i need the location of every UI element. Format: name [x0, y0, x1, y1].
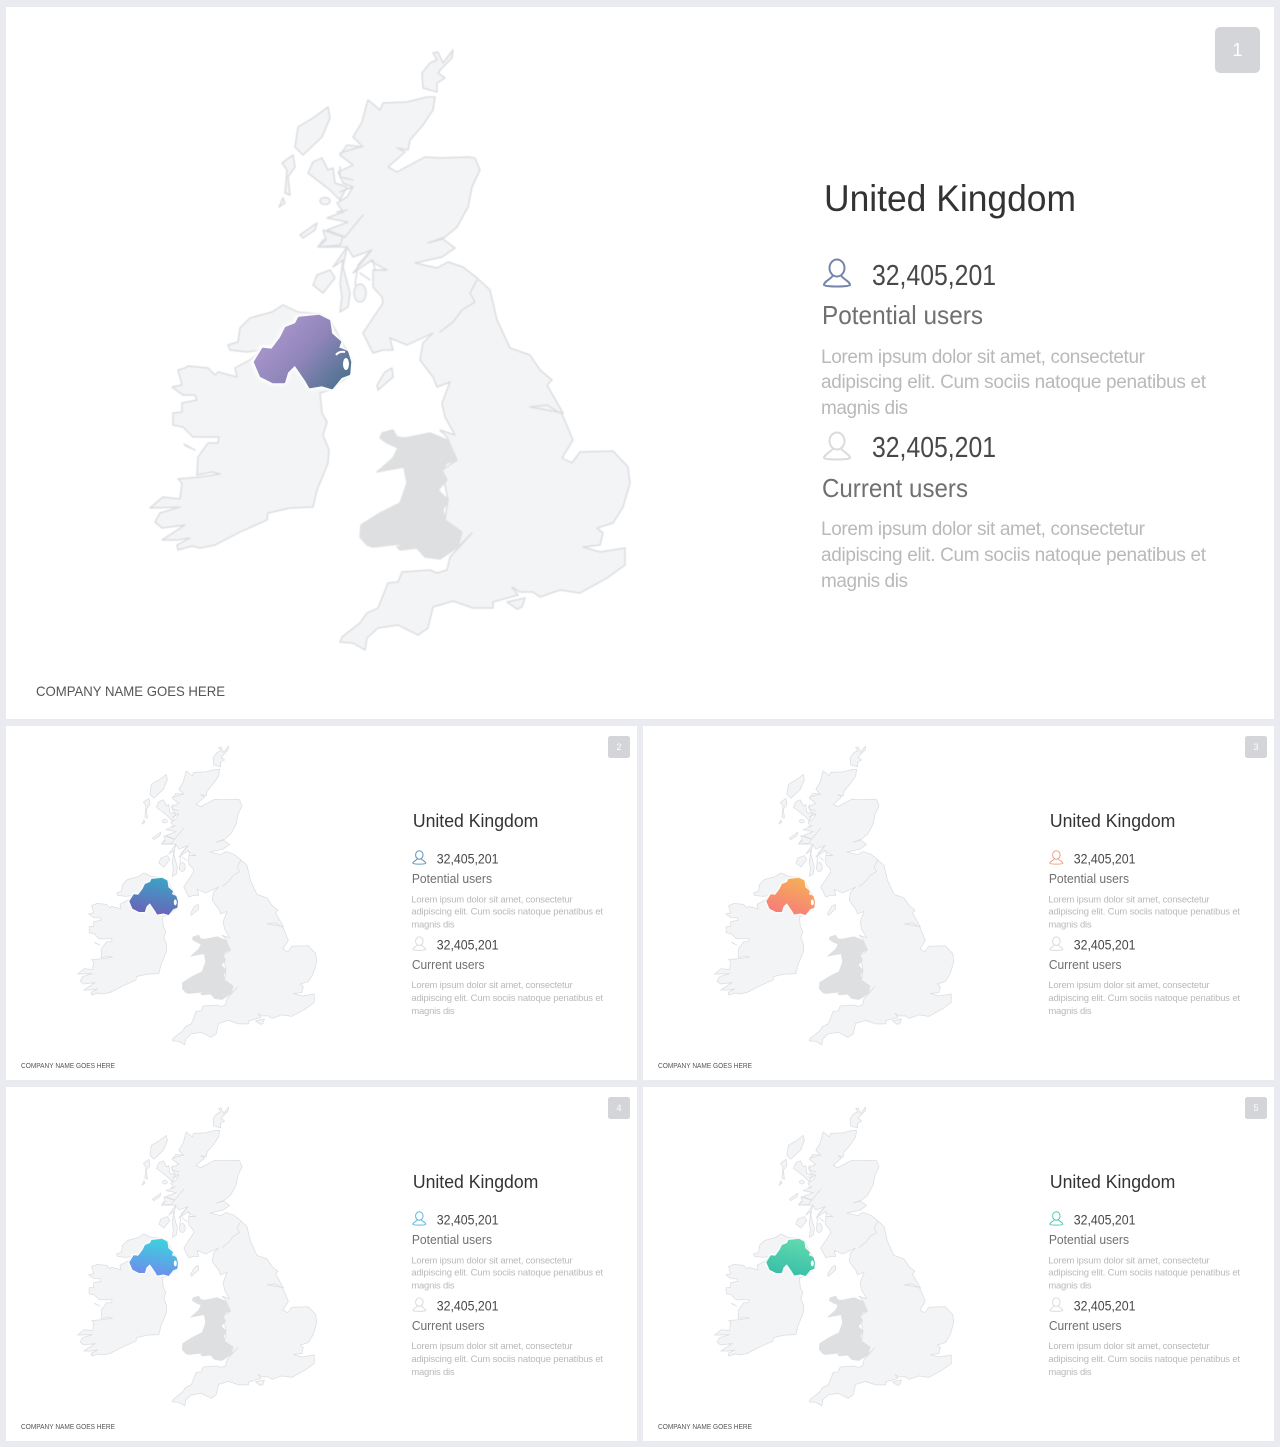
text column: Potential users — [1049, 1232, 1129, 1247]
page number badge: 5 — [1253, 1103, 1259, 1113]
text column: Current users — [412, 957, 485, 972]
text column: Lorem ipsum dolor sit amet, consectetur — [1048, 1255, 1210, 1266]
icon: user, potential — [824, 260, 850, 286]
potential users label: Potential users — [822, 300, 983, 330]
text column: Current users — [412, 1318, 485, 1333]
company name: COMPANY NAME GOES HERE — [658, 1063, 752, 1070]
text column — [411, 1171, 603, 1378]
text column: 32,405,201 — [437, 938, 499, 954]
panel: slide 5 — [643, 1087, 1274, 1441]
text column: 32,405,201 — [437, 1299, 499, 1315]
potential users figure: 32,405,201 — [872, 260, 996, 292]
text column: magnis dis — [1048, 1367, 1092, 1378]
map with highlighted region, orange — [715, 746, 954, 1045]
panel: slide 1 — [6, 7, 1274, 719]
highlighted region: Northern Ireland — [253, 315, 352, 390]
icon: user, current — [824, 432, 850, 460]
text column: 32,405,201 — [1074, 851, 1136, 867]
text column: Lorem ipsum dolor sit amet, consectetur — [411, 980, 573, 991]
text column: 32,405,201 — [1074, 1299, 1136, 1315]
text column: magnis dis — [1048, 920, 1092, 931]
potential users description: magnis dis — [821, 398, 908, 419]
potential users description: adipiscing elit. Cum sociis natoque penatibus et — [821, 372, 1207, 393]
current users description: Lorem ipsum dolor sit amet, consectetur — [821, 519, 1146, 540]
text column — [1048, 1171, 1240, 1378]
text column: magnis dis — [1048, 1006, 1092, 1017]
page number badge: 3 — [1253, 742, 1259, 752]
map with highlighted region, green — [715, 1107, 954, 1406]
text column: adipiscing elit. Cum sociis natoque penatibus et — [411, 1354, 603, 1365]
text column: Lorem ipsum dolor sit amet, consectetur — [1048, 1341, 1210, 1352]
text column: adipiscing elit. Cum sociis natoque penatibus et — [411, 907, 603, 918]
text column: Lorem ipsum dolor sit amet, consectetur — [411, 894, 573, 905]
text column: Current users — [1049, 957, 1122, 972]
text column: United Kingdom — [1050, 1171, 1175, 1192]
text column: United Kingdom — [413, 810, 538, 831]
text column: 32,405,201 — [1074, 938, 1136, 954]
text column: magnis dis — [411, 920, 455, 931]
text column: 32,405,201 — [437, 1212, 499, 1228]
page number badge: 2 — [616, 742, 622, 752]
text column: 32,405,201 — [1074, 1212, 1136, 1228]
current users figure: 32,405,201 — [872, 432, 996, 464]
panel: slide 2 — [6, 726, 637, 1080]
page number badge — [608, 1097, 630, 1119]
page number badge — [1245, 1097, 1267, 1119]
title: United Kingdom — [824, 177, 1076, 219]
text column: Current users — [1049, 1318, 1122, 1333]
text column: adipiscing elit. Cum sociis natoque penatibus et — [411, 993, 603, 1004]
map with highlighted region, blue — [78, 746, 317, 1045]
map with highlighted region, sky blue — [78, 1107, 317, 1406]
current users description: adipiscing elit. Cum sociis natoque penatibus et — [821, 545, 1207, 566]
company name: COMPANY NAME GOES HERE — [36, 683, 225, 699]
page number badge — [1215, 27, 1260, 73]
page number badge: 4 — [616, 1103, 622, 1113]
page number badge: 1 — [1232, 40, 1243, 60]
potential users description — [821, 347, 1207, 419]
current users label: Current users — [822, 473, 968, 503]
text column: magnis dis — [1048, 1281, 1092, 1292]
panel: slide 4 — [6, 1087, 637, 1441]
text column: adipiscing elit. Cum sociis natoque penatibus et — [1048, 907, 1240, 918]
panel: slide 3 — [643, 726, 1274, 1080]
text column: Lorem ipsum dolor sit amet, consectetur — [1048, 894, 1210, 905]
page number badge — [1245, 736, 1267, 758]
text column: Lorem ipsum dolor sit amet, consectetur — [1048, 980, 1210, 991]
text column: magnis dis — [411, 1367, 455, 1378]
current users description: magnis dis — [821, 571, 908, 592]
map: United Kingdom and Ireland — [150, 50, 630, 650]
text column: 32,405,201 — [437, 851, 499, 867]
text column — [1048, 810, 1240, 1017]
text column: Lorem ipsum dolor sit amet, consectetur — [411, 1255, 573, 1266]
text column: Potential users — [412, 871, 492, 886]
text column: Potential users — [1049, 871, 1129, 886]
text column: adipiscing elit. Cum sociis natoque penatibus et — [1048, 1354, 1240, 1365]
company name: COMPANY NAME GOES HERE — [658, 1424, 752, 1431]
text column: Lorem ipsum dolor sit amet, consectetur — [411, 1341, 573, 1352]
text column: magnis dis — [411, 1281, 455, 1292]
potential users description: Lorem ipsum dolor sit amet, consectetur — [821, 347, 1146, 368]
text column: adipiscing elit. Cum sociis natoque penatibus et — [1048, 993, 1240, 1004]
text column: adipiscing elit. Cum sociis natoque penatibus et — [1048, 1268, 1240, 1279]
text column: Potential users — [412, 1232, 492, 1247]
page number badge — [608, 736, 630, 758]
text column: adipiscing elit. Cum sociis natoque penatibus et — [411, 1268, 603, 1279]
text column: United Kingdom — [1050, 810, 1175, 831]
company name: COMPANY NAME GOES HERE — [21, 1424, 115, 1431]
company name: COMPANY NAME GOES HERE — [21, 1063, 115, 1070]
text column — [411, 810, 603, 1017]
text column: United Kingdom — [413, 1171, 538, 1192]
current users description — [821, 519, 1207, 592]
text column: magnis dis — [411, 1006, 455, 1017]
